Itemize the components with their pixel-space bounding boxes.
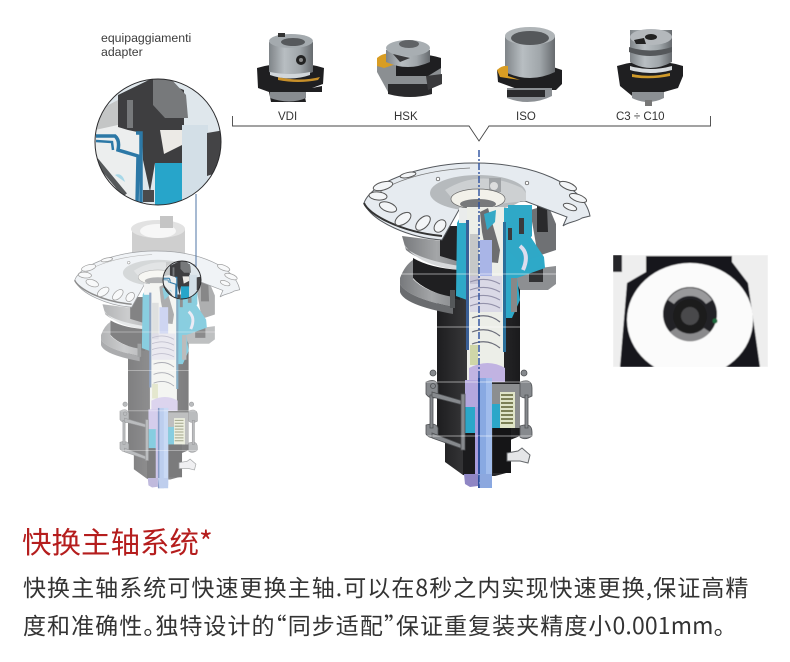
adapter: C3 ÷ C10 — [616, 29, 683, 123]
adapter: ISO — [497, 27, 562, 123]
description text: 度和准确性。独特设计的“同步适配”保证重复装夹精度小0.001mm。 — [23, 607, 738, 641]
label: VDI: VDI — [278, 111, 297, 123]
description text — [23, 569, 749, 641]
title: 快换主轴系统* — [22, 520, 213, 562]
label: HSK: HSK — [394, 111, 418, 123]
adapter label: adapter — [101, 45, 143, 59]
illustration area — [74, 27, 768, 488]
adapter: VDI — [257, 33, 324, 123]
left spindle (faded) — [65, 216, 240, 488]
main spindle — [350, 163, 590, 488]
label: ISO: ISO — [516, 111, 536, 123]
adapter: HSK — [377, 40, 442, 123]
small detail circle — [162, 260, 202, 300]
connector line — [195, 194, 197, 268]
centre axis dashed line — [478, 150, 480, 488]
big detail circle — [94, 78, 222, 206]
adapter label: equipaggiamenti — [101, 31, 191, 45]
photo of installed spindle — [613, 255, 768, 377]
label: C3 ÷ C10: C3 ÷ C10 — [616, 111, 664, 123]
bracket — [232, 116, 710, 141]
adapter label — [101, 31, 191, 59]
description text: 快换主轴系统可快速更换主轴.可以在8秒之内实现快速更换,保证高精 — [23, 569, 749, 603]
